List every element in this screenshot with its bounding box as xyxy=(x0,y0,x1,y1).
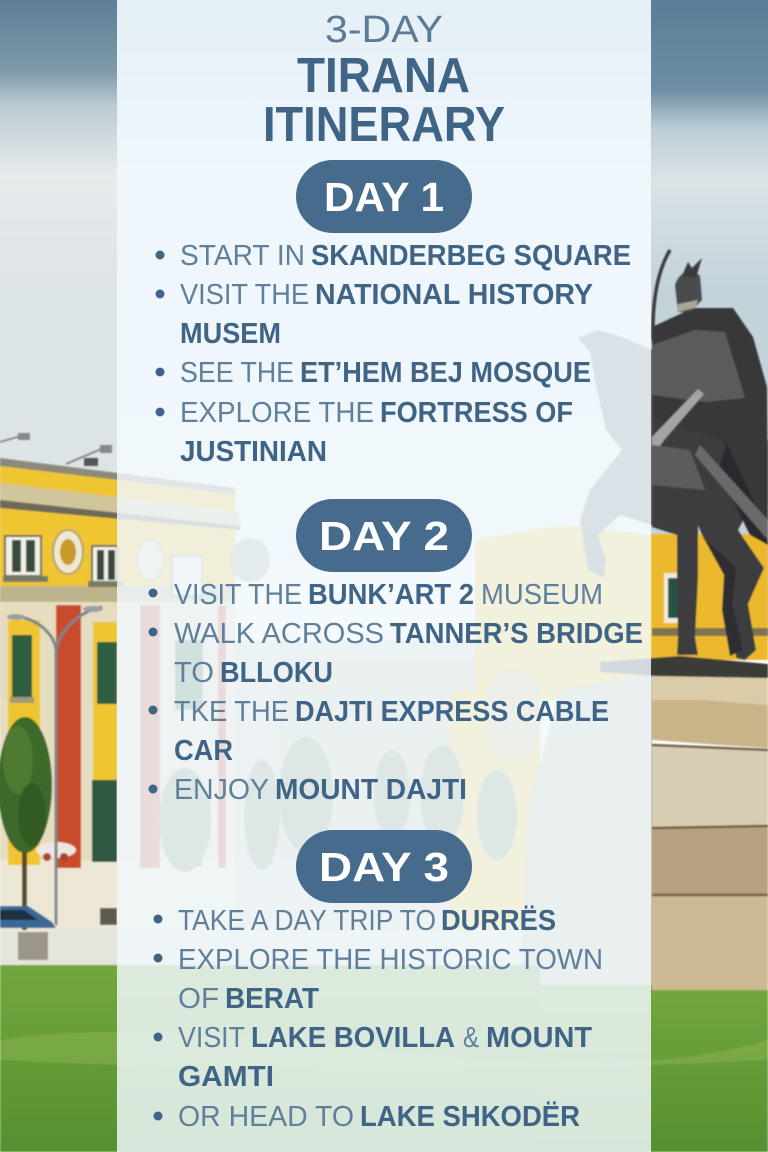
middle buildings xyxy=(235,640,475,930)
grass xyxy=(0,965,540,1152)
list: day 1 activities: JUSTINIAN xyxy=(180,436,327,468)
list: day 3 activities: TAKE A DAY TRIP TO xyxy=(178,905,436,937)
heading pill: DAY 2 xyxy=(296,499,472,572)
list: day 3 activities: EXPLORE THE HISTORIC TOWN xyxy=(178,944,603,976)
yellow window frames and shutters xyxy=(8,620,40,865)
title xyxy=(263,9,505,152)
title line: 3-DAY: 3-DAY xyxy=(325,9,443,51)
heading pill: DAY 2: DAY 2 xyxy=(319,513,449,559)
list: day 1 activities: NATIONAL HISTORY xyxy=(315,279,593,311)
list: day 3 activities: BERAT xyxy=(225,983,319,1015)
sword xyxy=(653,250,670,340)
lamps on roof xyxy=(0,435,106,464)
list: day 3 activities: OF xyxy=(178,983,219,1015)
list: day 2 activities: MUSEUM xyxy=(481,579,603,611)
wall and pavement xyxy=(0,930,540,965)
statue base xyxy=(600,656,768,678)
list: day 1 activities: SEE THE xyxy=(180,357,294,389)
list: day 2 activities: TO xyxy=(174,657,214,689)
list: day 3 activities: MOUNT xyxy=(486,1022,592,1054)
statue horse ghost xyxy=(578,330,652,578)
list: day 1 activities: VISIT THE xyxy=(180,279,309,311)
left tree xyxy=(22,850,27,930)
list: day 2 activities: CAR xyxy=(174,735,233,767)
list: day 2 activities: WALK ACROSS xyxy=(174,618,384,650)
list: day 3 activities: OR HEAD TO xyxy=(178,1101,354,1133)
list: day 2 activities xyxy=(148,579,643,806)
rider head xyxy=(675,271,702,312)
list: day 1 activities: EXPLORE THE xyxy=(180,397,374,429)
middle trees xyxy=(159,737,517,872)
heading pill: DAY 3: DAY 3 xyxy=(319,844,449,890)
left building wall xyxy=(0,458,235,930)
list: day 3 activities: VISIT xyxy=(178,1022,245,1054)
list: day 2 activities: BUNK’ART 2 xyxy=(308,579,474,611)
list: day 2 activities: MOUNT DAJTI xyxy=(275,774,467,806)
rider armour xyxy=(652,330,745,402)
list: day 3 activities: LAKE SHKODËR xyxy=(360,1100,580,1133)
title line: TIRANA: TIRANA xyxy=(297,49,470,103)
list: day 3 activities: DURRËS xyxy=(441,904,556,937)
list: day 1 activities: START IN xyxy=(180,240,305,272)
flower basket xyxy=(36,842,76,858)
list: day 1 activities: SKANDERBEG SQUARE xyxy=(311,240,631,272)
title line: ITINERARY: ITINERARY xyxy=(263,98,505,152)
list: day 1 activities xyxy=(156,240,631,468)
vent xyxy=(100,908,117,925)
statue horse body and legs xyxy=(652,420,768,660)
emblems xyxy=(53,530,83,574)
red columns xyxy=(56,605,81,868)
list: day 3 activities xyxy=(154,904,603,1133)
list: day 1 activities: MUSEM xyxy=(180,318,281,350)
list: day 2 activities: BLLOKU xyxy=(220,657,333,689)
list: day 2 activities: TKE THE xyxy=(174,696,289,728)
panel: translucent white itinerary column xyxy=(117,0,651,1152)
list: day 3 activities: LAKE BOVILLA xyxy=(251,1022,455,1054)
rider xyxy=(652,308,768,520)
list: day 1 activities: ET’HEM BEJ MOSQUE xyxy=(300,357,591,389)
list: day 1 activities: FORTRESS OF xyxy=(380,397,573,429)
heading pill: DAY 3 xyxy=(296,830,472,903)
car xyxy=(0,906,56,928)
heading pill: DAY 1: DAY 1 xyxy=(324,174,444,220)
right building xyxy=(652,534,768,660)
heading pill: DAY 1 xyxy=(296,160,472,233)
list: day 2 activities: DAJTI EXPRESS CABLE xyxy=(295,696,609,728)
lamp post xyxy=(10,607,102,925)
plinth rocks xyxy=(652,675,768,748)
list: day 2 activities: VISIT THE xyxy=(174,579,302,611)
list: day 2 activities: ENJOY xyxy=(174,774,269,806)
list: day 3 activities: & xyxy=(463,1022,479,1054)
list: day 3 activities: GAMTI xyxy=(178,1061,274,1093)
list: day 2 activities: TANNER’S BRIDGE xyxy=(390,618,643,650)
windows upper xyxy=(5,536,41,576)
